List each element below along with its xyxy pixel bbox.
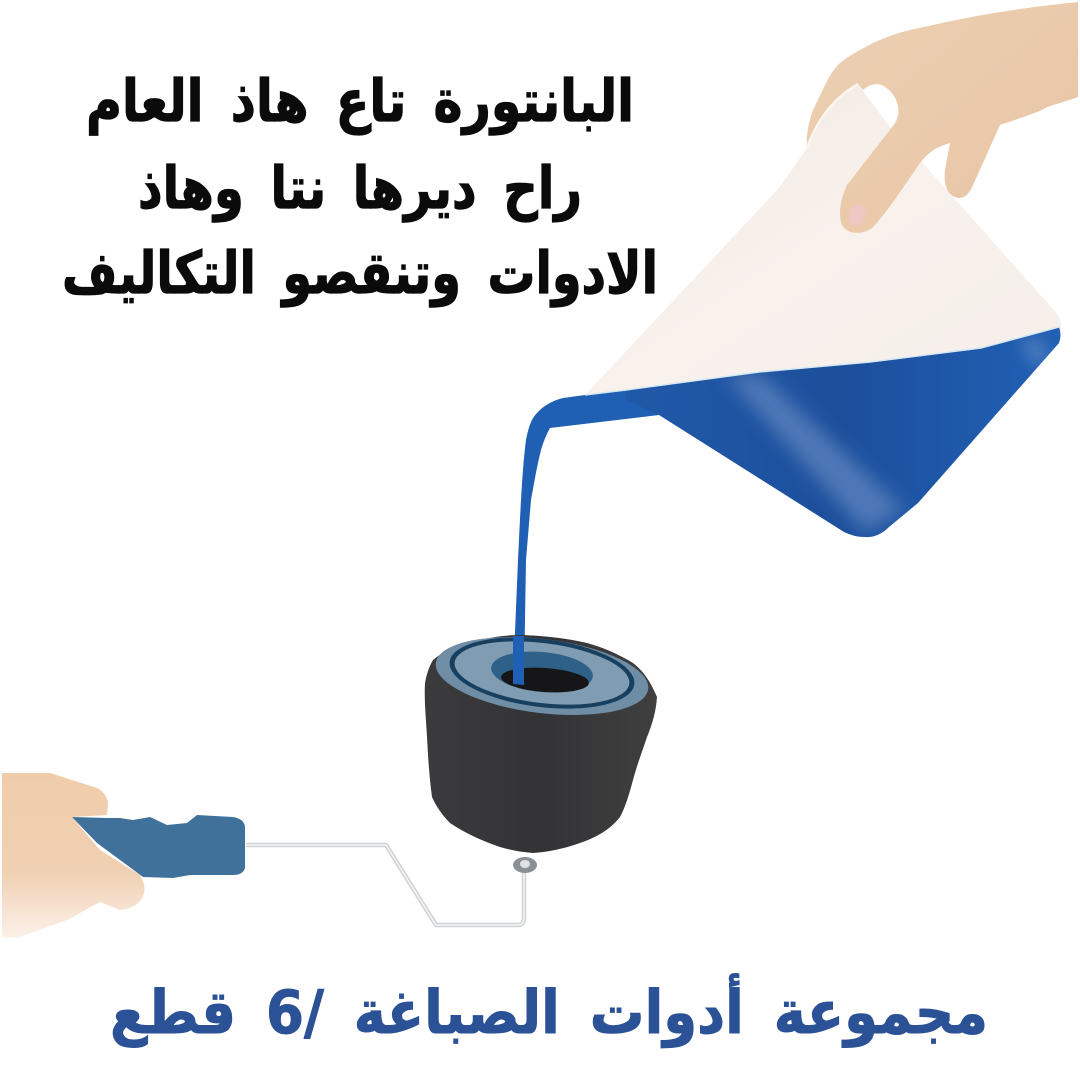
lid opening — [489, 648, 595, 696]
paint stream and spout — [513, 389, 680, 680]
heading: top three-line Arabic text: الادوات وتنقصو التكاليف — [62, 239, 658, 308]
handle — [72, 815, 245, 878]
blue lid dark groove — [446, 628, 638, 718]
foam sleeve — [425, 635, 657, 853]
stream in hole — [513, 636, 524, 685]
heading: top three-line Arabic text — [62, 67, 658, 308]
roller bolt — [513, 857, 537, 873]
jug rim edge — [807, 84, 858, 148]
heading: top three-line Arabic text: راح ديرها نتا وهاذ — [138, 154, 582, 223]
thumb nail — [846, 202, 868, 228]
icon: hand holding jug — [807, 2, 1078, 233]
paint surface line — [585, 327, 1059, 395]
light reflections on paint — [725, 338, 1048, 532]
footer title: مجموعة أدوات الصباغة /6 قطع — [110, 973, 988, 1048]
illustration: measuring jug pouring paint — [513, 84, 1061, 680]
jug body — [585, 84, 1061, 400]
paint in jug — [626, 327, 1060, 537]
icon: hand holding roller handle — [2, 773, 245, 938]
lid hole — [500, 665, 590, 695]
blue lid outer — [431, 626, 653, 726]
wire frame — [246, 845, 524, 925]
heading: top three-line Arabic text: البانتورة تاع هاذ العام — [86, 67, 634, 136]
hand — [2, 773, 144, 938]
blue lid ring — [451, 632, 633, 714]
icon: paint roller with foam sleeve — [246, 626, 657, 925]
